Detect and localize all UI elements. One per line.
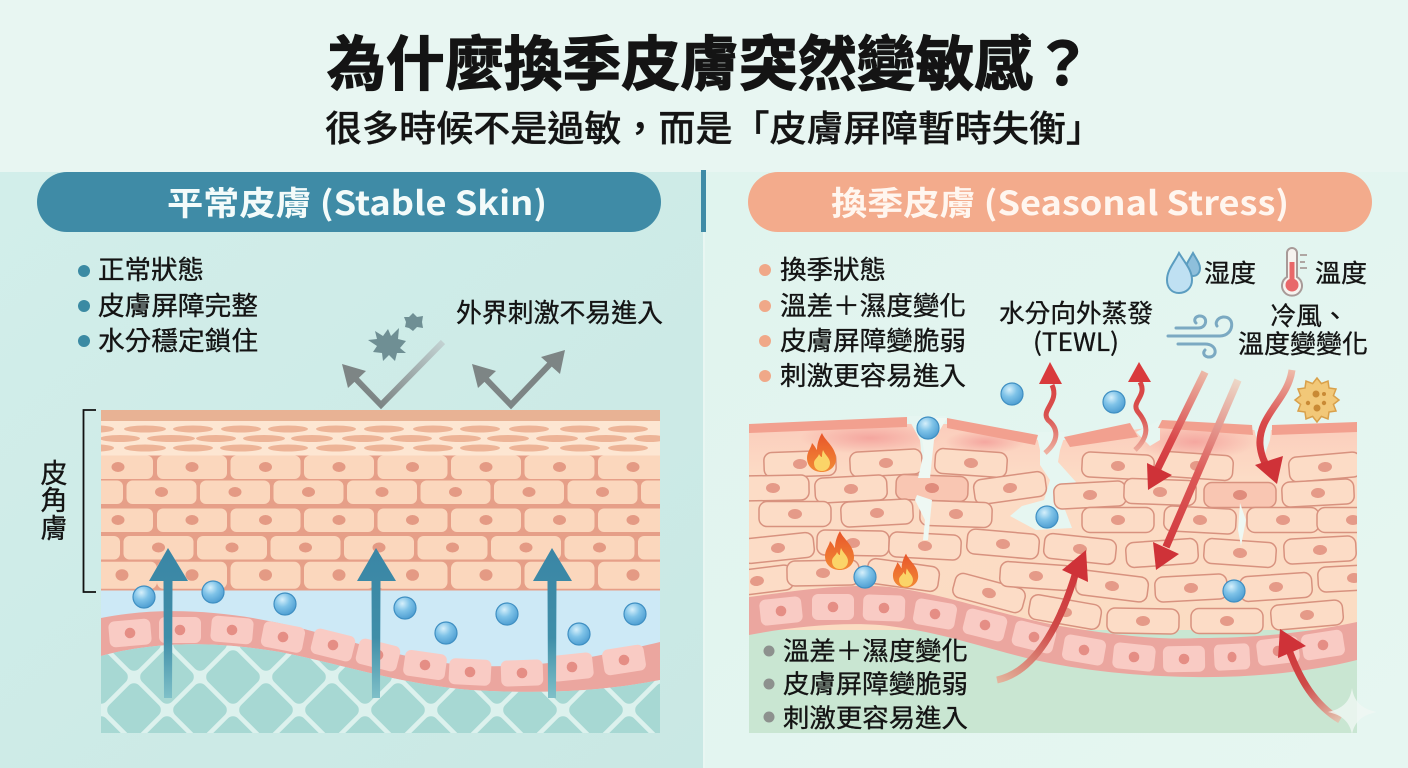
dermis [749, 630, 1357, 733]
damaged skin body [749, 424, 1357, 630]
label: stratum corneum: 膚 [40, 507, 68, 546]
callout: cold wind and temperature change: 溫度變變化 [1238, 324, 1368, 361]
panel: seasonal stress [720, 172, 1391, 735]
icon: humidity drops [1167, 253, 1200, 293]
bullet list: stable skin: 正常狀態 [98, 250, 204, 287]
water droplets [133, 581, 646, 645]
label: temperature: 溫度 [1315, 254, 1367, 290]
barrier cracks [907, 416, 1272, 530]
icon: allergen particle [1295, 378, 1339, 422]
callout: evaporation TEWL [999, 294, 1153, 359]
basal cell band [101, 611, 660, 692]
callout: evaporation TEWL: 水分向外蒸發 [999, 294, 1153, 330]
label: stratum corneum: 皮 [40, 452, 68, 491]
label: stratum corneum [40, 452, 68, 546]
bullet list: lower effects: 皮膚屏障變脆弱 [783, 664, 968, 701]
bullet list: stable skin: 水分穩定鎖住 [98, 321, 258, 358]
callout: evaporation TEWL: (TEWL) [1033, 323, 1119, 359]
bullet list: seasonal stress: 皮膚屏障變脆弱 [780, 321, 966, 358]
bullet list: lower effects: 溫差＋濕度變化 [783, 631, 968, 668]
surface fragments [749, 417, 1357, 447]
label: humidity: 湿度 [1204, 254, 1256, 290]
icon: irritant particles [368, 313, 423, 361]
arrow: irritant entering C [1255, 370, 1292, 484]
icon: thermometer [1282, 248, 1307, 296]
diagram: healthy skin cross-section [101, 410, 660, 733]
header pill: stable skin [37, 172, 661, 232]
arrow: deflected irritant right [472, 350, 565, 405]
icon: flames [807, 433, 918, 588]
water droplets escaping [854, 383, 1245, 602]
callout: cold wind and temperature change: 冷風、 [1270, 296, 1348, 333]
bullet list: seasonal stress [759, 250, 966, 393]
title: 為什麼換季皮膚突然變敏感？ [327, 17, 1092, 102]
panel background: seasonal stress [705, 172, 1408, 768]
callout: barrier blocks irritants: 外界刺激不易進入 [456, 293, 663, 330]
bullet list: lower effects: 刺激更容易進入 [783, 698, 968, 735]
arrow: irritant deep right [1278, 629, 1340, 720]
panel: stable skin [37, 172, 711, 733]
icon: cold wind [1168, 316, 1232, 357]
icon: sparkle [1328, 688, 1377, 735]
brick cell layers [101, 456, 660, 590]
lower dermis lattice [101, 644, 660, 733]
small fissures through cells [915, 418, 1246, 546]
skin cells, disrupted [720, 448, 1391, 634]
diagram: stressed skin cross-section [720, 416, 1391, 733]
basal cell band [749, 586, 1357, 677]
arrows: water evaporating outward [1039, 362, 1151, 453]
header pill: stable skin: 平常皮膚 (Stable Skin) [167, 177, 547, 225]
bullet list: stable skin [78, 250, 258, 358]
bracket: stratum corneum [84, 410, 96, 592]
inflammation blush [814, 428, 1244, 454]
label: stratum corneum: 角 [40, 479, 68, 518]
flattened keratin layer [82, 421, 666, 457]
header pill: seasonal stress [748, 172, 1372, 232]
fluid layer [101, 590, 660, 666]
bullet list: seasonal stress: 換季狀態 [780, 250, 886, 287]
surface layer [101, 410, 660, 421]
subtitle: 很多時候不是過敏，而是「皮膚屏障暫時失衡」 [325, 100, 1103, 152]
arrow: irritant deep left [997, 550, 1088, 680]
arrow: irritant entering B [1153, 380, 1238, 570]
bullet list: lower effects [764, 631, 968, 735]
bullet list: seasonal stress: 刺激更容易進入 [780, 356, 966, 393]
header pill: seasonal stress: 換季皮膚 (Seasonal Stress) [831, 177, 1289, 225]
panel divider [701, 170, 706, 232]
panel background: stable skin [0, 172, 703, 768]
arrows: moisture retained upward [149, 548, 572, 698]
bullet list: stable skin: 皮膚屏障完整 [98, 286, 258, 323]
callout: cold wind and temperature change [1238, 296, 1368, 361]
arrow: irritant entering A [1147, 372, 1205, 490]
bullet list: seasonal stress: 溫差＋濕度變化 [780, 286, 966, 323]
arrow: deflected irritant left [342, 342, 443, 405]
